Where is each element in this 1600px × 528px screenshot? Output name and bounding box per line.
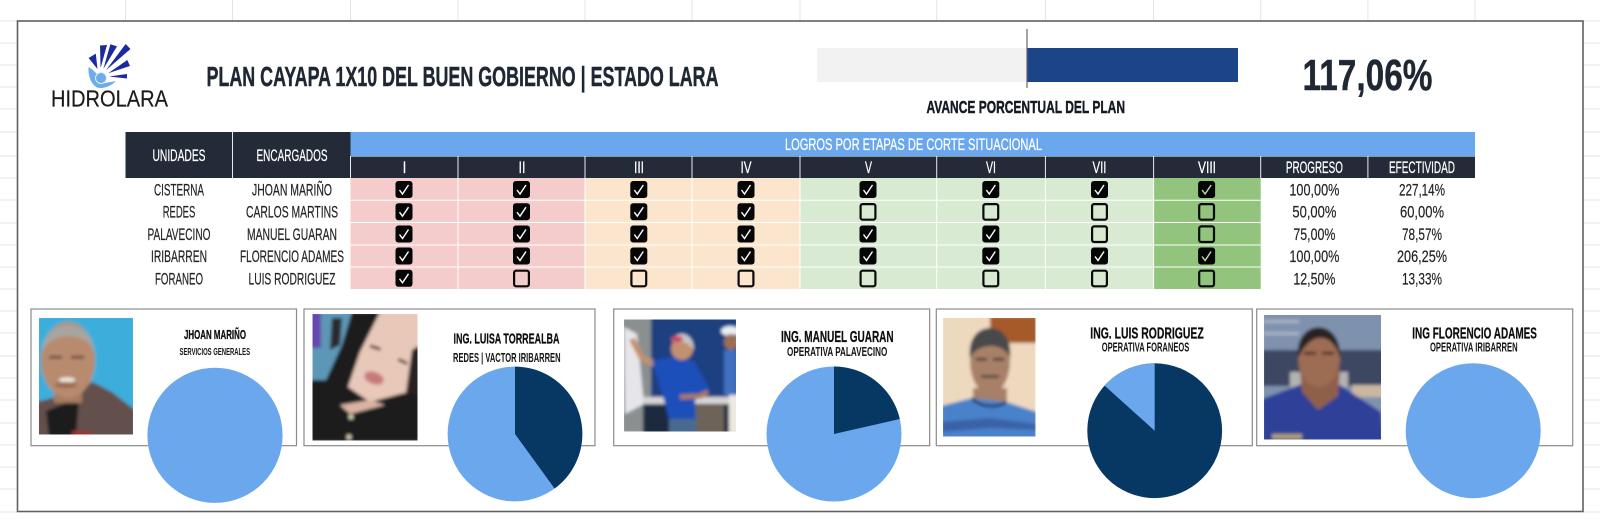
table header: IV [740,159,752,177]
row: Redes: REDES [163,204,195,222]
table header: EFECTIVIDAD [1389,159,1455,177]
panel: Luis Rodriguez [936,309,1252,498]
photo: Manuel Guaran [622,317,739,434]
row: Palavecino: 75,00% [1293,226,1336,244]
row: Cisterna: CISTERNA [154,182,204,200]
table header: PROGRESO [1286,159,1343,177]
photo: Luisa Torrealba [310,312,420,442]
progress bar label: AVANCE PORCENTUAL DEL PLAN [926,97,1125,117]
row: Palavecino: 78,57% [1402,226,1442,244]
row: Iribarren: 100,00% [1289,248,1340,266]
stage colour bands [350,178,1261,289]
pie chart: 60% [448,367,582,501]
row: Cisterna: 100,00% [1289,182,1340,200]
role: OPERATIVA PALAVECINO [787,345,888,359]
role: SERVICIOS GENERALES [180,347,250,358]
table header: VIII [1198,159,1216,177]
table header: I [403,159,406,177]
row: Palavecino: PALAVECINO [148,226,211,244]
logo: Hidrolara [51,44,169,112]
row: Foraneo [155,270,1442,288]
name: ING. LUISA TORREALBA [454,330,560,347]
name: JHOAN MARIÑO [184,327,246,342]
row: Iribarren: 206,25% [1397,248,1447,266]
row: Cisterna [154,180,1445,200]
photo: Florencio Adames [1262,312,1384,442]
row: Foraneo: LUIS RODRIGUEZ [248,270,336,288]
row: Redes: 60,00% [1400,204,1444,222]
logo wordmark: HIDROLARA [51,86,169,112]
achievements table [126,132,1475,289]
table header [126,132,1475,178]
photo: Luis Rodriguez [941,315,1037,439]
table header: ENCARGADOS [256,147,328,165]
role: OPERATIVA FORANEOS [1102,341,1189,355]
icon: fan and water drop [88,44,130,88]
pie chart: 100% [1406,363,1541,498]
row: Redes [163,203,1444,222]
panel: Jhoan Mariño [31,309,296,503]
pie chart: 78.57% [766,366,902,502]
row: Iribarren: FLORENCIO ADAMES [240,248,344,266]
table header: V [865,159,872,177]
row: Cisterna: JHOAN MARIÑO [252,180,332,200]
row: Palavecino [148,226,1442,244]
panel: Luisa Torrealba [304,309,595,501]
name: ING. MANUEL GUARAN [781,329,894,346]
row: Palavecino: MANUEL GUARAN [247,226,337,244]
title: PLAN CAYAPA 1X10 DEL BUEN GOBIERNO | ESTADO LARA [206,61,719,92]
panel: Florencio Adames [1257,309,1573,498]
table header: VII [1092,159,1106,177]
table header: LOGROS POR ETAPAS DE CORTE SITUACIONAL [785,136,1042,154]
panel: Manuel Guaran [614,309,930,502]
progress bar [817,29,1238,88]
row: Cisterna: 227,14% [1399,182,1445,200]
role: REDES | VACTOR IRIBARREN [453,351,561,365]
name: ING. LUIS RODRIGUEZ [1090,326,1204,343]
pie chart: 100% [147,368,283,503]
row: Iribarren [151,248,1447,266]
row: Foraneo: 12,50% [1293,270,1336,288]
row: Foraneo: 13,33% [1402,270,1442,288]
table header: UNIDADES [152,147,206,165]
pie chart: 12.5% [1087,363,1222,498]
row: Redes: CARLOS MARTINS [246,204,338,222]
role: OPERATIVA IRIBARREN [1430,341,1518,355]
row: Redes: 50,00% [1292,204,1337,222]
row: Iribarren: IRIBARREN [151,248,207,266]
row: Foraneo: FORANEO [155,270,203,288]
table header: VI [986,159,996,177]
photo: Jhoan Mariño [39,318,133,434]
table header: II [518,159,526,177]
overall percentage: 117,06% [1302,52,1432,100]
table header: III [634,159,644,177]
